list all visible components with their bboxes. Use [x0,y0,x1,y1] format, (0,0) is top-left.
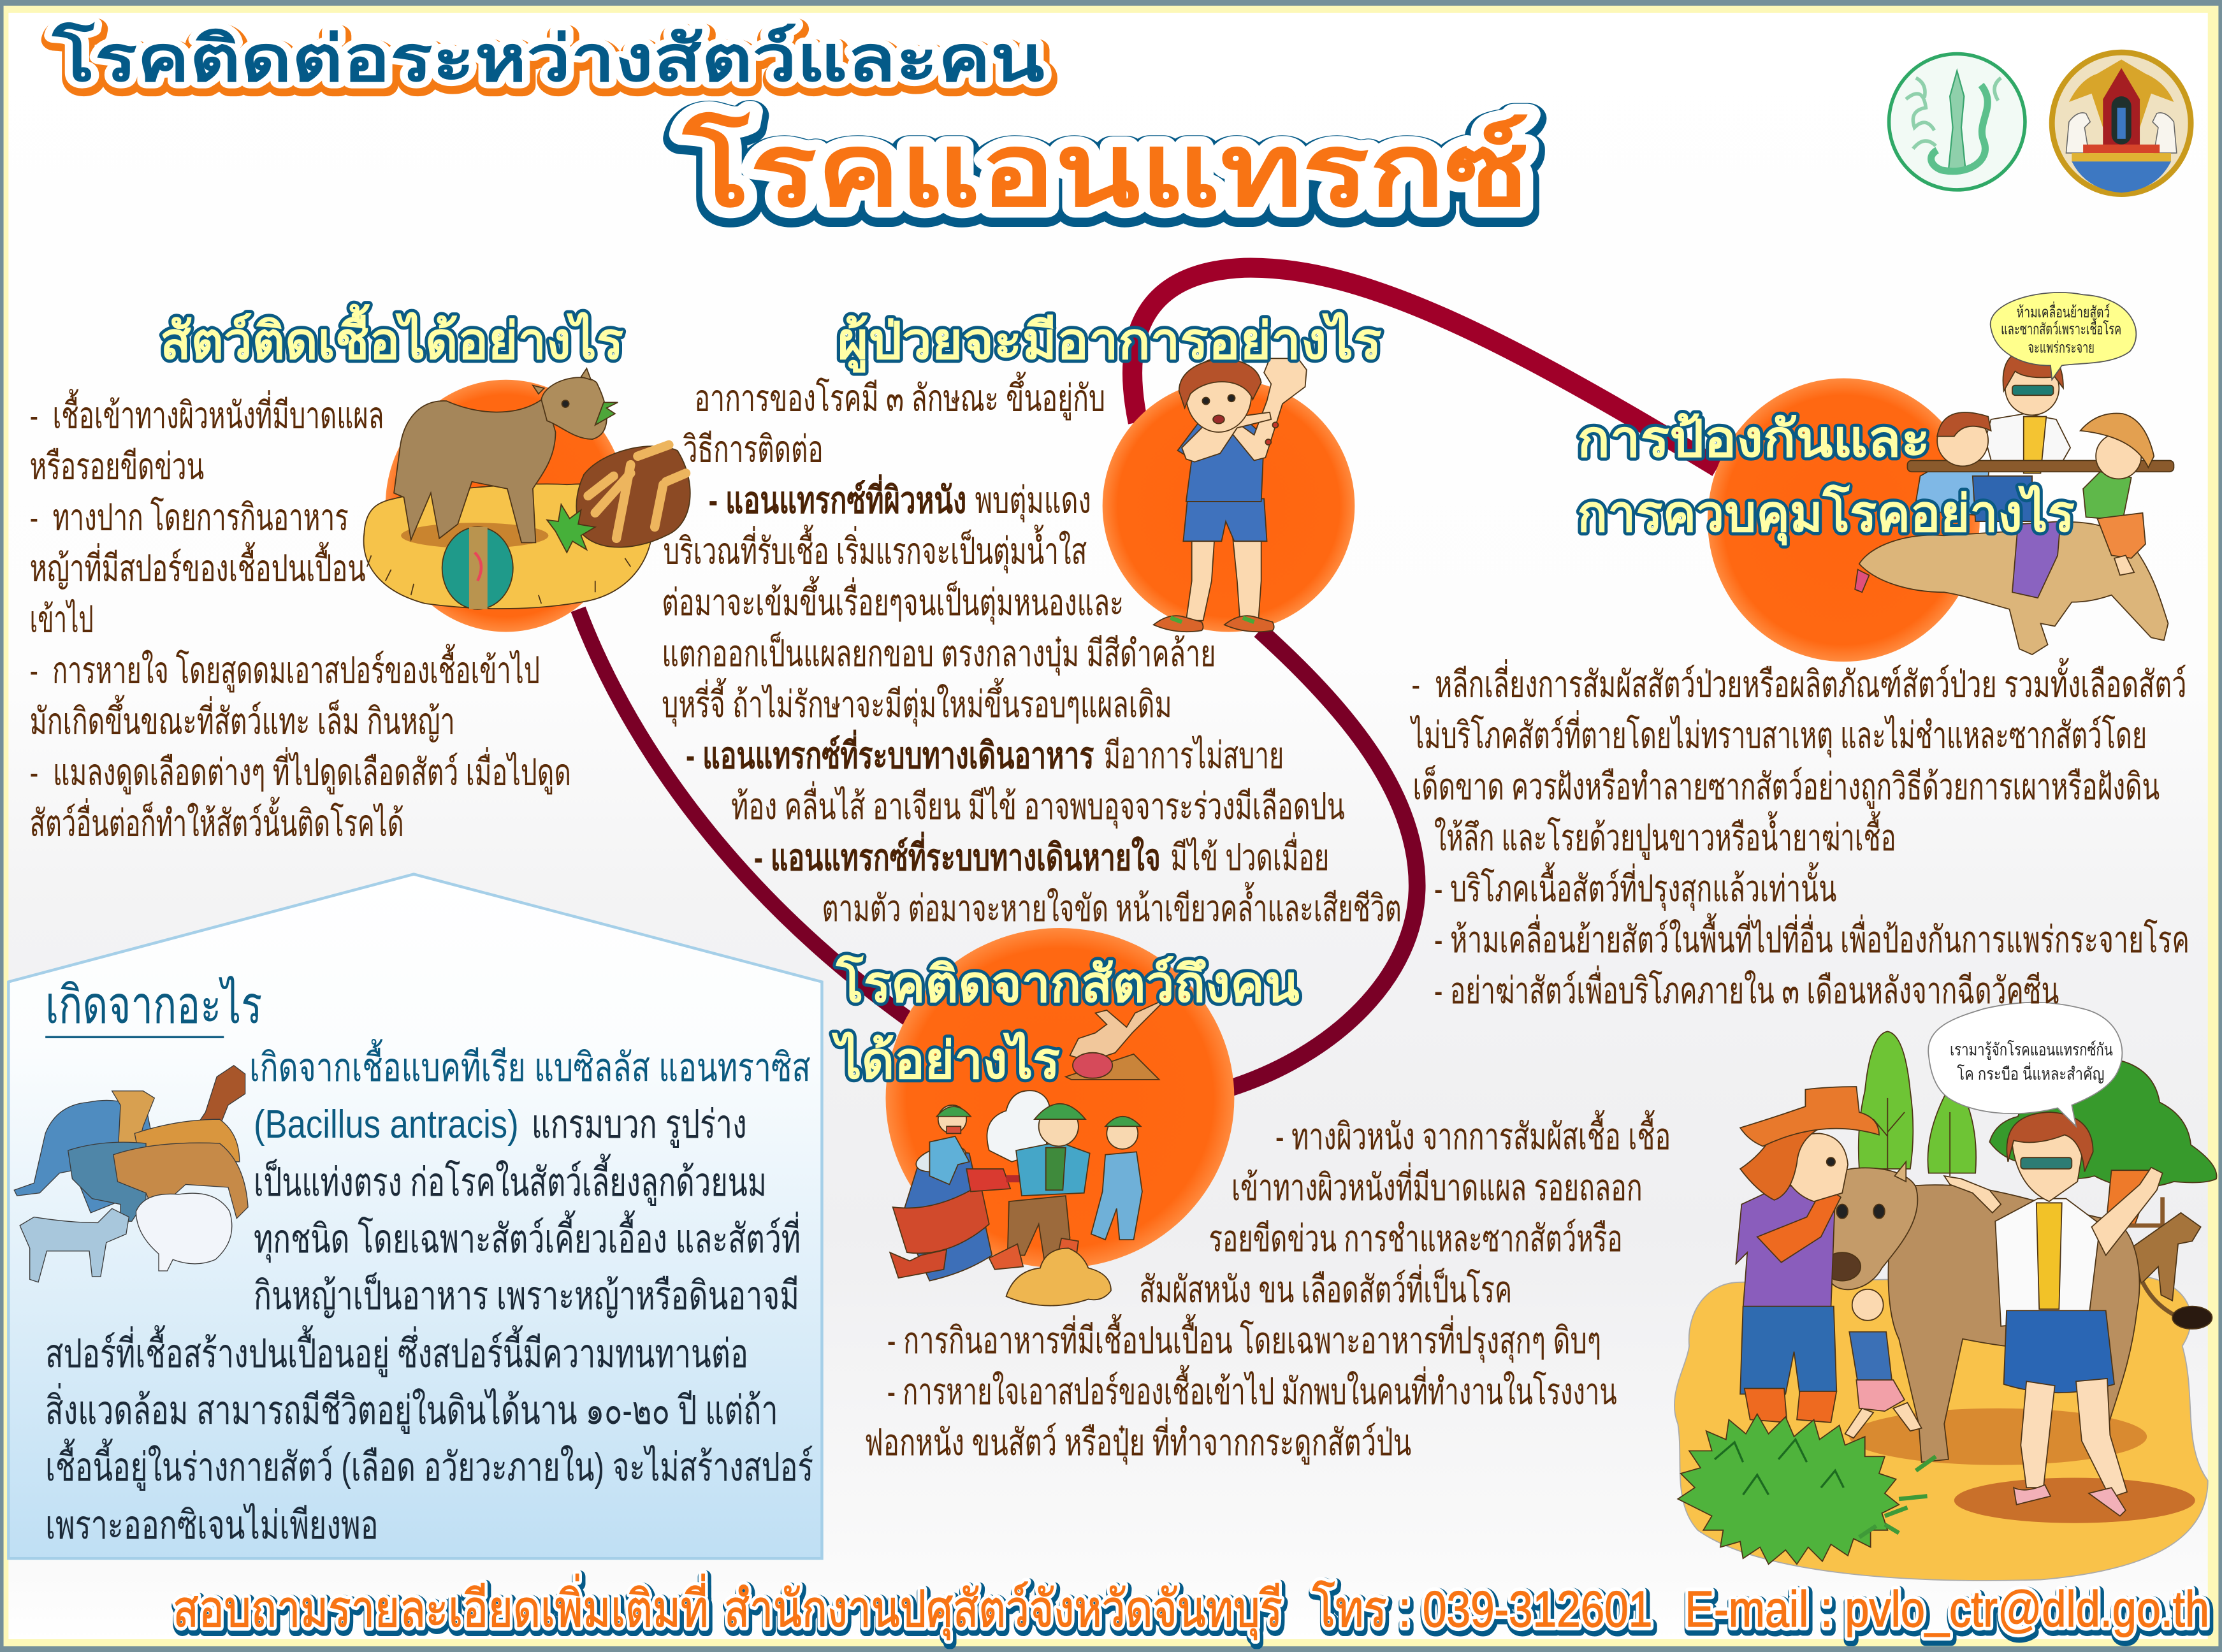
icon: green seal logo [1889,54,2025,190]
heading: prevention and control [1577,410,2075,546]
callout: do not move animals speech bubble [1991,293,2136,380]
text: cause description: กินหญ้าเป็นอาหาร เพราะหญ้าหรือดินอาจมี [254,1272,799,1318]
footer: contact information: สำนักงานปศุสัตว์จังหวัดจันทบุรี [725,1583,1284,1642]
text block: how humans get infected: - ทางผิวหนัง จากการสัมผัสเชื้อ เชื้อ [1275,1110,1671,1157]
footer: contact information: สำนักงานปศุสัตว์จังหวัดจันทบุรี [724,1581,1282,1640]
text block: patient symptoms: ท้อง คลื่นไส้ อาเจียน มีไข้ อาจพบอุจจาระร่วงมีเลือดปน [731,781,1345,829]
text block: patient symptoms: บริเวณที่รับเชื้อ เริ่มแรกจะเป็นตุ่มน้ำใส [663,525,1087,574]
callout: do not move animals speech bubble: จะแพร่กระจาย [2028,340,2095,357]
text block: how animals get infected: - ทางปาก โดยการกินอาหาร [30,496,349,538]
footer: contact information: สอบถามรายละเอียดเพิ่มเติมที่ [174,1577,710,1640]
connector: patient symptoms to prevention [1133,268,1718,468]
icon: gold provincial seal logo [2052,52,2191,194]
text: cause description: เป็นแท่งตรง ก่อโรคในสัตว์เลี้ยงลูกด้วยนม [254,1154,767,1206]
illustration: workers with barrel, hands cutting meat and bone pile [890,999,1166,1306]
footer: contact information: โทร : 039-312601 [1312,1580,1652,1637]
text block: how humans get infected: ฟอกหนัง ขนสัตว์ หรือปุ๋ย ที่ทำจากกระดูกสัตว์ป่น [864,1417,1411,1465]
text: cause description: (Bacillus antracis) [254,1103,519,1147]
text: cause description [45,1039,813,1547]
callout: do not move animals speech bubble: ห้ามเคลื่อนย้ายสัตว์ [2017,301,2110,321]
text block: how humans get infected: สัมผัสหนัง ขน เลือดสัตว์ที่เป็นโรค [1139,1264,1512,1310]
heading: how humans catch it from animals: โรคติดจากสัตว์ถึงคน [836,954,1300,1013]
title: zoonotic diseases: โรคติดต่อระหว่างสัตว์และคน [52,22,1045,95]
orange circle: patient symptoms [1103,380,1354,632]
connector: patient symptoms to human infection [1230,630,1417,1088]
heading: what causes it: เกิดจากอะไร [45,976,262,1034]
text block: how animals get infected: สัตว์อื่นต่อก็ทำให้สัตว์นั้นติดโรคได้ [30,797,404,844]
illustration: boy pointing at skin lesions [1154,358,1307,632]
heading: how humans catch it from animals [831,954,1300,1089]
callout: let's learn about anthrax speech bubble: เรามารู้จักโรคแอนแทรกซ์กัน [1950,1040,2113,1060]
text block: patient symptoms: อาการของโรคมี ๓ ลักษณะ ขึ้นอยู่กับ [694,372,1105,421]
orange circle: human infection [886,928,1234,1268]
text block: how animals get infected: มักเกิดขึ้นขณะที่สัตว์แทะ เล็ม กินหญ้า [30,695,455,743]
title: anthrax: โรคแอนแทรกซ์ [681,111,1529,227]
text: cause description: เกิดจากเชื้อแบคทีเรีย แบซิลลัส แอนทราซิส [249,1039,811,1090]
callout: do not move animals speech bubble: และซากสัตว์เพราะเชื้อโรค [2001,318,2121,338]
text block: patient symptoms: วิธีการติดต่อ [683,430,824,470]
footer: contact information: โทร : 039-312601 [1314,1583,1653,1640]
text block: patient symptoms: มีอาการไม่สบาย [1104,734,1284,776]
heading: what symptoms patients have: ผู้ป่วยจะมีอาการอย่างไร [838,311,1382,373]
text block: how animals get infected: - การหายใจ โดยสูดดมเอาสปอร์ของเชื้อเข้าไป [30,644,540,692]
title: anthrax: โรคแอนแทรกซ์ [681,115,1529,231]
text block: how animals get infected: - เชื้อเข้าทางผิวหนังที่มีบาดแผล [30,389,384,436]
footer: contact information: สอบถามรายละเอียดเพิ่มเติมที่ [173,1574,709,1637]
panel: what causes anthrax [8,874,822,1558]
illustration: woman, doctor, child and cow in pasture [1674,1031,2217,1581]
illustration: children on buffalo with speech bubble [1855,349,2174,655]
footer: contact information [173,1574,2211,1642]
text: cause description: แกรมบวก รูปร่าง [532,1103,747,1148]
text: cause description: ทุกชนิด โดยเฉพาะสัตว์เคี้ยวเอื้อง และสัตว์ที่ [254,1210,801,1263]
text block: how animals get infected: หรือรอยขีดข่วน [30,446,204,487]
text: cause description: เชื้อนี้อยู่ในร่างกายสัตว์ (เลือด อวัยวะภายใน) จะไม่สร้างสปอร์ [45,1438,813,1491]
orange circle: prevention [1708,379,1980,662]
callout: let's learn about anthrax speech bubble [1928,1003,2122,1126]
title: zoonotic diseases: โรคติดต่อระหว่างสัตว์และคน [53,25,1046,99]
heading: prevention and control: การป้องกันและ [1577,410,1930,467]
footer: contact information: สำนักงานปศุสัตว์จังหวัดจันทบุรี [724,1581,1282,1640]
text block: how humans get infected [864,1110,1671,1465]
heading: how humans catch it from animals: ได้อย่างไร [831,1031,1060,1089]
text block: patient symptoms [662,372,1402,929]
text block: patient symptoms: - แอนแทรกซ์ที่ระบบทางเดินหายใจ [754,832,1161,878]
text block: how humans get infected: - การหายใจเอาสปอร์ของเชื้อเข้าไป มักพบในคนที่ทำงานในโรงงาน [887,1365,1617,1412]
title: anthrax: โรคแอนแทรกซ์ [681,111,1529,227]
text block: how humans get infected: รอยขีดข่วน การชำแหละซากสัตว์หรือ [1209,1219,1623,1259]
text: cause description: เพราะออกซิเจนไม่เพียงพอ [45,1502,379,1547]
text block: how animals get infected: - แมลงดูดเลือดต่างๆ ที่ไปดูดเลือดสัตว์ เมื่อไปดูด [30,748,571,795]
illustration: group of livestock [14,1066,248,1282]
connector: animal infection to human infection [578,609,910,1020]
orange circle: animal infection [386,380,627,632]
text: cause description: สิ่งแวดล้อม สามารถมีชีวิตอยู่ในดินได้นาน ๑๐-๒๐ ปี แต่ถ้า [45,1383,778,1435]
text block: patient symptoms: บุหรี่จี้ ถ้าไม่รักษาจะมีตุ่มใหม่ขึ้นรอบๆแผลเดิม [662,678,1172,727]
heading: prevention and control: การควบคุมโรคอย่างไร [1577,484,2075,546]
text block: how animals get infected [30,389,571,844]
text block: patient symptoms: มีไข้ ปวดเมื่อย [1170,832,1329,878]
text block: patient symptoms: - แอนแทรกซ์ที่ผิวหนัง [709,475,966,521]
footer: contact information: สอบถามรายละเอียดเพิ่มเติมที่ [173,1574,709,1637]
text block: patient symptoms: พบตุ่มแดง [975,481,1091,523]
text block: prevention and control: - บริโภคเนื้อสัตว์ที่ปรุงสุกแล้วเท่านั้น [1434,862,1836,911]
illustration: cow on yellow ground with bacteria [364,368,690,609]
footer: contact information: โทร : 039-312601 [1312,1580,1652,1637]
text block: prevention and control [1410,658,2189,1011]
text: cause description: สปอร์ที่เชื้อสร้างปนเปื้อนอยู่ ซึ่งสปอร์นี้มีความทนทานต่อ [45,1325,748,1378]
text block: patient symptoms: แตกออกเป็นแผลยกขอบ ตรงกลางบุ๋ม มีสีดำคล้าย [662,632,1216,676]
text block: patient symptoms: - แอนแทรกซ์ที่ระบบทางเดินอาหาร [686,730,1094,776]
heading: how animals get infected: สัตว์ติดเชื้อได้อย่างไร [160,303,623,369]
text block: patient symptoms: ตามตัว ต่อมาจะหายใจขัด หน้าเขียวคล้ำและเสียชีวิต [822,882,1402,929]
title: zoonotic diseases: โรคติดต่อระหว่างสัตว์และคน [52,22,1045,95]
text block: patient symptoms: ต่อมาจะเข้มขึ้นเรื่อยๆจนเป็นตุ่มหนองและ [662,576,1124,625]
text block: prevention and control: ให้ลึก และโรยด้วยปูนขาวหรือน้ำยาฆ่าเชื้อ [1434,811,1896,860]
text block: how humans get infected: - การกินอาหารที่มีเชื้อปนเปื้อน โดยเฉพาะอาหารที่ปรุงสุกๆ ดิบๆ [887,1314,1601,1363]
callout: let's learn about anthrax speech bubble: โค กระบือ นี่แหละสำคัญ [1957,1062,2104,1083]
text block: how animals get infected: หญ้าที่มีสปอร์ของเชื้อปนเปื้อน [30,542,366,589]
text block: how humans get infected: เข้าทางผิวหนังที่มีบาดแผล รอยถลอก [1231,1163,1643,1208]
text block: how animals get infected: เข้าไป [30,598,94,640]
